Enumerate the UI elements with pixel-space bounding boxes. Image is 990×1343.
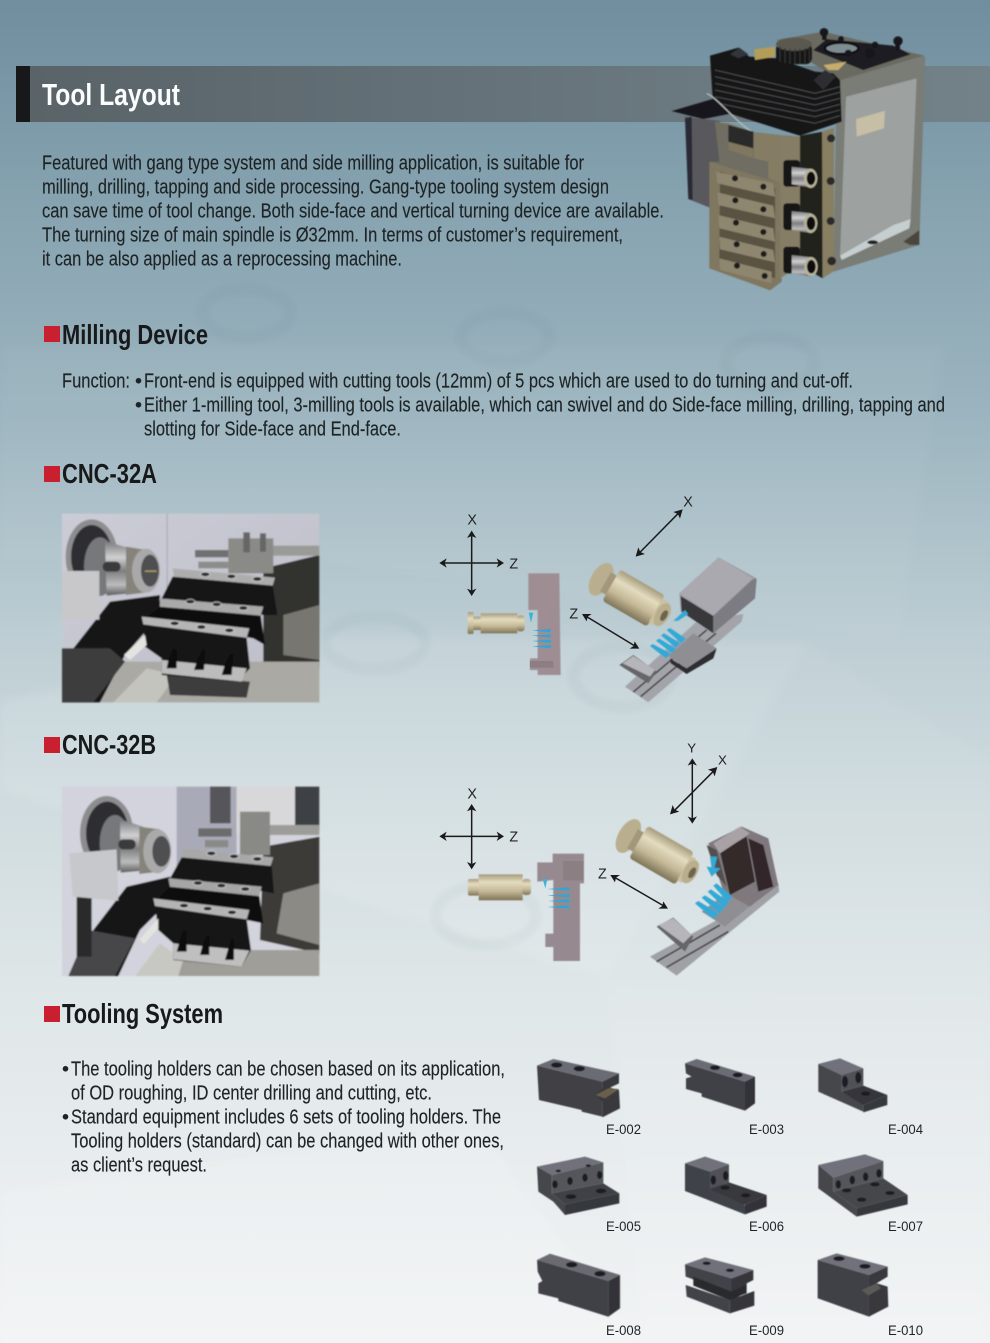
function text block: • [135, 395, 142, 417]
tooling text block: • [62, 1107, 69, 1129]
spindle [468, 612, 525, 634]
tool holders grid [537, 1058, 908, 1317]
axis cross: X Z [439, 513, 518, 596]
axis cross: X Z: Z [509, 556, 518, 572]
holder E-004 [818, 1058, 887, 1112]
holder E-007 [818, 1154, 908, 1217]
tool plate [537, 854, 584, 961]
holder labels: E-005 [606, 1219, 641, 1234]
heading: CNC-32A: CNC-32A [62, 458, 157, 489]
machine photo: gang tool unit [672, 28, 925, 290]
motion arrows: Z [569, 607, 578, 623]
slide base with tools [619, 557, 757, 702]
tooling text block: Tooling holders (standard) can be changed with other ones, [71, 1131, 504, 1153]
spindle [468, 874, 531, 900]
holder E-006 [685, 1157, 767, 1214]
axis diagram: CNC-32A front view [439, 495, 757, 702]
tooling text block: • [62, 1059, 69, 1081]
axis diagram: CNC-32B [439, 740, 779, 976]
function text block: Function: [62, 371, 130, 393]
holder labels: E-010 [888, 1323, 923, 1338]
motion arrows: Z [598, 866, 607, 882]
intro text block: milling, drilling, tapping and side processing. Gang-type tooling system design [42, 177, 609, 199]
axis cross: X Z [439, 786, 518, 869]
holder E-008 [537, 1254, 620, 1317]
milling spindle [610, 815, 706, 891]
holder E-005 [537, 1157, 619, 1215]
holder labels: E-002 [606, 1122, 641, 1137]
heading: Tooling System: Tooling System [62, 998, 223, 1029]
function text block [62, 371, 945, 441]
holder E-009 [685, 1257, 754, 1313]
holder labels: E-009 [749, 1323, 784, 1338]
tooling text block: as client’s request. [71, 1155, 207, 1177]
intro text block [42, 153, 664, 271]
tooling text block: The tooling holders can be chosen based on its application, [71, 1059, 505, 1081]
intro text block: can save time of tool change. Both side-face and vertical turning device are available. [42, 201, 664, 223]
motion arrows [569, 495, 693, 649]
holder labels: E-003 [749, 1122, 784, 1137]
slide base and column [650, 827, 779, 976]
axis cross: X Z: X [467, 513, 477, 529]
holder labels: E-007 [888, 1219, 923, 1234]
header black tab [16, 66, 30, 122]
holder E-003 [685, 1059, 755, 1111]
photo: CNC-32B tooling [62, 787, 319, 976]
holder labels: E-004 [888, 1122, 923, 1137]
heading: CNC-32B: CNC-32B [62, 729, 156, 760]
title: Tool Layout [42, 77, 180, 112]
photo: CNC-32A tooling [62, 514, 319, 702]
function text block: • [135, 371, 142, 393]
heading: CNC-32A [44, 458, 157, 489]
holder E-002 [537, 1059, 620, 1117]
axis cross: X Z: X [467, 786, 477, 802]
header band [30, 66, 990, 122]
function text block: slotting for Side-face and End-face. [144, 419, 401, 441]
holder labels: E-006 [749, 1219, 784, 1234]
holder labels: E-008 [606, 1323, 641, 1338]
motion arrows: X [718, 752, 727, 767]
function text block: Front-end is equipped with cutting tools (12mm) of 5 pcs which are used to do turning and cut-off. [144, 371, 853, 393]
tooling text block [62, 1059, 505, 1177]
motion arrows: X [683, 495, 693, 511]
holder E-010 [818, 1253, 888, 1317]
intro text block: The turning size of main spindle is Ø32mm. In terms of customer’s requirement, [42, 225, 623, 247]
motion arrows: Y [687, 740, 696, 755]
intro text block: Featured with gang type system and side milling application, is suitable for [42, 153, 584, 175]
motion arrows [598, 740, 727, 909]
milling spindle [583, 559, 677, 634]
axis cross: X Z: Z [509, 830, 518, 846]
tooling text block: Standard equipment includes 6 sets of tooling holders. The [71, 1107, 501, 1129]
heading: CNC-32B [44, 729, 156, 760]
tool plate [528, 573, 561, 675]
intro text block: it can be also applied as a reprocessing machine. [42, 249, 402, 271]
holder labels [606, 1122, 923, 1338]
tooling text block: of OD roughing, ID center drilling and cutting, etc. [71, 1083, 432, 1105]
heading: Milling Device: Milling Device [62, 319, 208, 350]
